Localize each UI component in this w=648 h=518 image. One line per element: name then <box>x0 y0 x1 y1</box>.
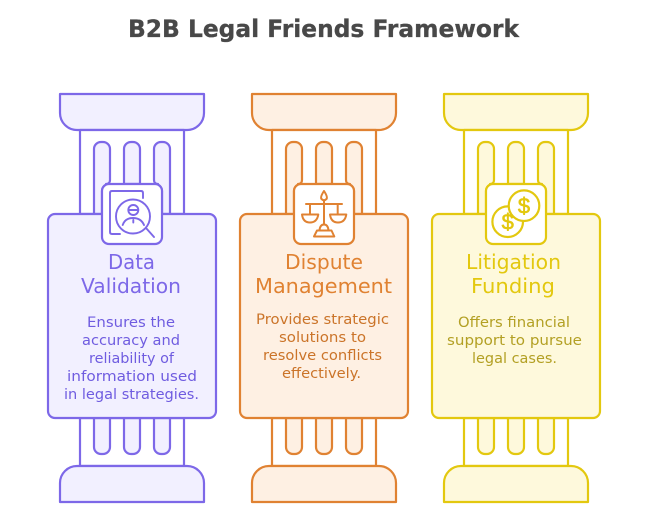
upper shaft <box>272 130 376 214</box>
icon box <box>102 184 162 244</box>
icon: dollar coins <box>492 190 539 237</box>
body text: litigation funding <box>447 315 582 367</box>
capital <box>60 94 204 130</box>
icon box <box>486 184 546 244</box>
body text: litigation funding: support to pursue <box>447 333 582 349</box>
body text: dispute management: resolve conflicts <box>263 348 382 364</box>
body text: litigation funding: legal cases. <box>472 351 557 367</box>
icon: magnified person on document <box>110 191 154 237</box>
heading: data validation: Data <box>108 250 155 274</box>
lower flutes <box>94 418 170 454</box>
icon box <box>294 184 354 244</box>
heading: dispute management <box>255 250 392 298</box>
heading: data validation <box>81 250 181 298</box>
card <box>432 214 600 418</box>
lower shaft <box>464 418 568 466</box>
panel: dispute management pillar <box>240 94 408 502</box>
panel: data validation pillar <box>48 94 216 502</box>
card <box>240 214 408 418</box>
capital <box>252 94 396 130</box>
panel: litigation funding pillar <box>432 94 600 502</box>
lower shaft <box>80 418 184 466</box>
upper flutes <box>94 142 170 214</box>
body text: dispute management: solutions to <box>279 330 366 346</box>
icon: scales of justice <box>302 191 346 236</box>
heading: litigation funding: Litigation <box>466 250 561 274</box>
body text: litigation funding: Offers financial <box>458 315 570 331</box>
upper flutes <box>286 142 362 214</box>
body text: data validation: reliability of <box>89 351 175 367</box>
body text: data validation: in legal strategies. <box>64 387 199 403</box>
icon: dollar coins: $ <box>502 210 514 235</box>
body text: dispute management: Provides strategic <box>256 312 389 328</box>
heading: litigation funding: Funding <box>471 274 555 298</box>
body text: dispute management: effectively. <box>282 366 361 382</box>
heading: dispute management: Dispute <box>285 250 363 274</box>
lower shaft <box>272 418 376 466</box>
body text: data validation: Ensures the <box>87 315 175 331</box>
heading: dispute management: Management <box>255 274 392 298</box>
lower flutes <box>478 418 554 454</box>
icon: dollar coins: $ <box>518 194 530 219</box>
upper shaft <box>464 130 568 214</box>
heading: litigation funding <box>466 250 561 298</box>
base <box>60 466 204 502</box>
upper flutes <box>478 142 554 214</box>
upper shaft <box>80 130 184 214</box>
lower flutes <box>286 418 362 454</box>
base <box>444 466 588 502</box>
body text: data validation: information used <box>67 369 197 385</box>
title: B2B Legal Friends Framework <box>128 15 520 43</box>
heading: data validation: Validation <box>81 274 181 298</box>
base <box>252 466 396 502</box>
capital <box>444 94 588 130</box>
body text: data validation: accuracy and <box>82 333 180 349</box>
body text: data validation <box>64 315 199 403</box>
body text: dispute management <box>256 312 389 382</box>
card <box>48 214 216 418</box>
